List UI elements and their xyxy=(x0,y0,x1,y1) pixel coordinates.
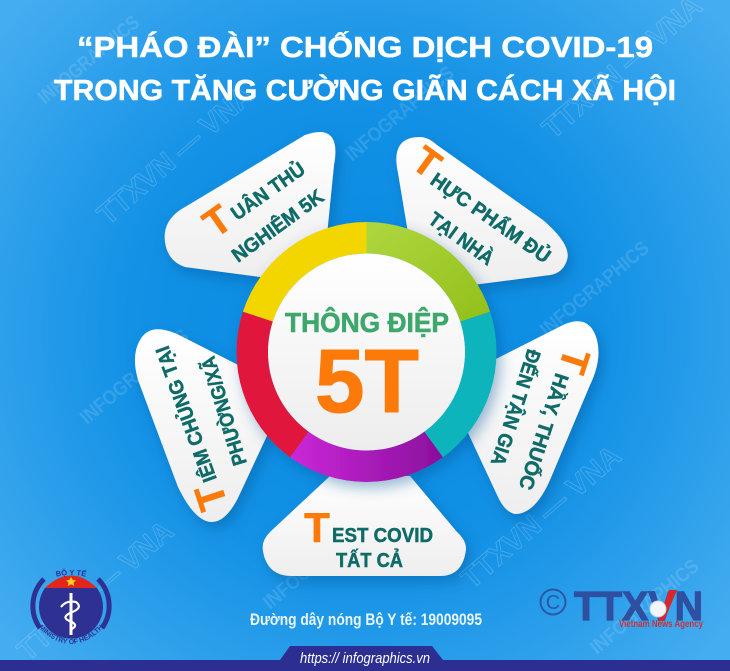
logo: ttxvn: Vietnam News Agency xyxy=(619,618,703,630)
watermarks: TTXVN — VNA xyxy=(92,79,260,231)
logo: ministry of health: MINISTRY OF HEALTH xyxy=(40,624,102,644)
title xyxy=(54,30,676,107)
watermarks: INFOGRAPHICS xyxy=(259,510,377,614)
panel: thầy thuốc đến tận gia: HẦY, THUỐC xyxy=(514,370,574,493)
panel: tiêm chủng tại phường/xã: T xyxy=(187,479,236,515)
panel: thầy thuốc đến tận gia xyxy=(462,321,598,514)
panel: tuân thủ nghiêm 5K: UÂN THỦ xyxy=(226,157,309,225)
panel: tiêm chủng tại phường/xã: PHƯỜNG/XÃ xyxy=(196,353,252,469)
watermarks: INFOGRAPHICS xyxy=(341,62,459,166)
centre disc: thông điệp 5T xyxy=(268,254,465,450)
panel: test covid tất cả: TẤT CẢ xyxy=(336,549,403,572)
watermarks: INFOGRAPHICS xyxy=(536,237,654,341)
panel: tuân thủ nghiêm 5K: T xyxy=(196,197,240,246)
logo: ministry of health: BỘ Y TẾ xyxy=(56,568,86,577)
footer bar xyxy=(0,646,730,671)
panel: thầy thuốc đến tận gia: T xyxy=(550,343,597,378)
panel: test covid tất cả: T xyxy=(304,504,330,551)
panel: test covid tất cả: EST COVID xyxy=(332,525,433,547)
watermarks: INFOGRAPHICS xyxy=(586,555,704,659)
panel: test covid tất cả xyxy=(263,476,466,576)
panel: tuân thủ nghiêm 5K: NGHIÊM 5K xyxy=(227,184,329,267)
panel: tuân thủ nghiêm 5K xyxy=(165,132,335,279)
panel: thực phẩm đủ tại nhà: TẠI NHÀ xyxy=(424,207,498,270)
panel: tiêm chủng tại phường/xã xyxy=(135,329,272,522)
panel: thực phẩm đủ tại nhà xyxy=(396,137,568,286)
logo: ttxvn: TTXVN xyxy=(574,583,703,629)
panel: thực phẩm đủ tại nhà: HỰC PHẨM ĐỦ xyxy=(426,167,555,268)
watermarks: TTXVN — VNA xyxy=(456,440,628,595)
footer bar: https:// infographics.vn xyxy=(300,650,430,667)
panel: thầy thuốc đến tận gia: ĐẾN TẬN GIA xyxy=(486,346,546,469)
title: TRONG TĂNG CƯỜNG GIÃN CÁCH XÃ HỘI xyxy=(54,73,676,107)
panel: thực phẩm đủ tại nhà: T xyxy=(404,138,449,187)
title: “PHÁO ĐÀI” CHỐNG DỊCH COVID-19 xyxy=(77,30,653,64)
watermarks: INFOGRAPHICS xyxy=(76,325,194,429)
chart: five-colour ring xyxy=(237,222,496,482)
panel: tiêm chủng tại phường/xã: IÊM CHỦNG TẠI xyxy=(150,343,222,485)
centre disc: thông điệp 5T: THÔNG ĐIỆP xyxy=(285,306,449,338)
centre disc: thông điệp 5T: 5T xyxy=(315,332,419,432)
watermarks: TTXVN — VNA xyxy=(12,515,180,667)
logo: ministry of health xyxy=(30,568,112,644)
hotline text: Đường dây nóng Bộ Y tế: 19009095 xyxy=(250,610,482,629)
logo: ttxvn: C xyxy=(546,592,560,614)
